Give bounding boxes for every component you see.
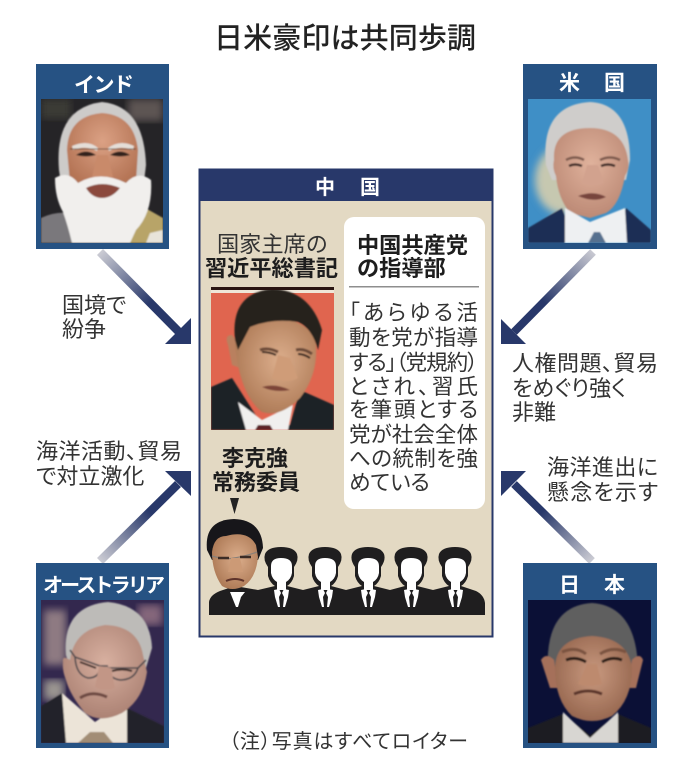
label: concern over maritime advance: 海洋進出に: [547, 455, 658, 480]
arrow: Japan to China: [501, 471, 592, 561]
photo: Biden: [528, 99, 651, 243]
panel: Japan: [523, 563, 657, 748]
arrow: United States to China: [501, 252, 593, 344]
label: human rights and trade: 非難: [512, 400, 556, 425]
body text: 党が社会全体: [349, 423, 478, 447]
body text: を筆頭とする: [349, 398, 478, 422]
panel: Australia: [36, 563, 169, 748]
label: United States: 米 国: [559, 72, 625, 95]
label: Li Keqiang: 常務委員: [212, 470, 300, 495]
label: human rights and trade: 人権問題、貿易: [512, 351, 658, 376]
label: maritime activity and trade: で対立激化: [36, 464, 144, 489]
header: China: 中 国: [315, 176, 380, 199]
silhouettes: standing committee: [207, 519, 485, 615]
header: China: [199, 169, 493, 201]
label: border dispute: 紛争: [62, 317, 106, 342]
pointer triangle: [230, 498, 239, 514]
body text: とされ、習氏: [349, 375, 478, 399]
callout: Communist Party leadership: [344, 217, 485, 509]
body text: めている: [349, 471, 430, 495]
label: India: インド: [74, 74, 134, 97]
label: Xi Jinping: 習近平総書記: [205, 256, 338, 281]
label: maritime activity and trade: 海洋活動、貿易: [36, 439, 182, 464]
label: human rights and trade: をめぐり強く: [512, 376, 626, 401]
panel: China: [199, 169, 493, 636]
arrow: Australia to China: [100, 471, 191, 561]
heading: leadership: の指導部: [357, 256, 446, 281]
photo: Xi Jinping: [211, 287, 334, 430]
body text: する」（党規約）: [349, 351, 478, 375]
panel: India: [36, 64, 169, 249]
body text: 「あらゆる活: [349, 301, 478, 325]
arrow: India to China: [100, 252, 191, 344]
note: photo credit: （注）写真はすべてロイター: [229, 730, 468, 753]
label: Australia: オーストラリア: [43, 575, 165, 597]
label: Li Keqiang: 李克強: [222, 446, 288, 471]
title: 日米豪印は共同歩調: [214, 22, 476, 55]
body text: への統制を強: [349, 447, 478, 471]
label: Japan: 日 本: [559, 574, 625, 597]
label: border dispute: 国境で: [62, 293, 126, 318]
photo: Morrison: [41, 600, 164, 743]
photo: Modi: [41, 99, 163, 243]
label: Xi Jinping: 国家主席の: [217, 232, 328, 257]
panel: United States: [523, 64, 657, 249]
heading: leadership: 中国共産党: [357, 233, 468, 258]
label: concern over maritime advance: 懸念を示す: [547, 480, 658, 505]
photo: Li Keqiang: [207, 519, 263, 607]
body text: 動を党が指導: [349, 326, 478, 350]
photo: Suga: [528, 600, 651, 743]
